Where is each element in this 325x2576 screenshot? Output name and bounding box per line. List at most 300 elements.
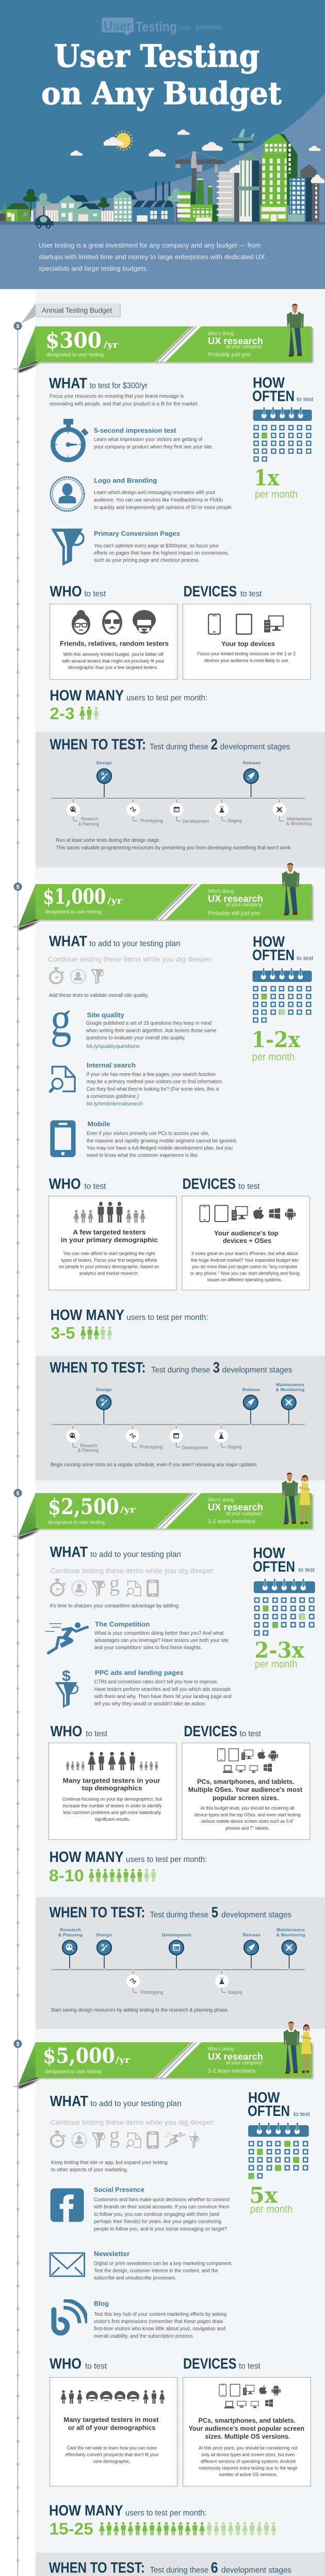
item: mobile: You may not have a full-fledged mobile development plan, but you — [87, 1145, 233, 1151]
stage timeline: Staging — [228, 1990, 242, 1995]
DEVICES panel: sizes. Multiple OS versions. — [205, 2433, 290, 2441]
DEVICES panel: you do more than just target users on "any computer — [192, 1264, 298, 1269]
stage timeline: Development — [162, 1932, 191, 1937]
DEVICES panel: to test — [240, 589, 262, 599]
stage timeline: Research — [81, 817, 98, 822]
DEVICES panel: the huge Android market? Your expanded budget lets — [191, 1258, 299, 1263]
item: logo and branding: Logo and Branding — [94, 477, 157, 484]
stage timeline: & Planning — [58, 1932, 83, 1937]
DEVICES panel: only all device types and screen sizes, but even — [201, 2452, 295, 2458]
stage timeline: Development — [183, 819, 209, 824]
DEVICES panel: DEVICES — [184, 583, 237, 600]
HOW OFTEN: OFTEN — [253, 1558, 295, 1575]
stage timeline: & Planning — [78, 821, 99, 826]
WHAT heading — [48, 934, 213, 998]
WHAT heading: Continue testing these items while you dig deeper: — [51, 2118, 215, 2126]
banner: $5,000: Who's doing — [208, 2046, 234, 2052]
item: PPC ads and landing pages: PPC ads and landing pages — [95, 1669, 184, 1676]
DEVICES panel: Multiple OSes. Your audience's most — [188, 1786, 303, 1793]
tab: annual testing budget — [21, 303, 121, 324]
DEVICES panel: At this price point, you should be considering not — [199, 2446, 298, 2451]
banner: $2,500: 1-2 team members — [208, 1519, 255, 1525]
item: internal search — [50, 1061, 223, 1107]
item: the competition: The Competition — [95, 1620, 150, 1628]
item: PPC ads and landing pages: $ — [62, 1668, 71, 1685]
HOW MANY — [49, 2503, 278, 2538]
item: newsletter: subscribe and unsubscribe processes. — [94, 2276, 176, 2281]
WHAT heading: WHAT — [50, 2093, 88, 2110]
stage timeline: Development — [182, 1445, 208, 1450]
item: PPC ads and landing pages: CTRs and conversion rates don't tell you how to improve. — [94, 1680, 218, 1685]
tab: annual testing budget: Annual Testing Budget — [42, 306, 112, 314]
banner: $5,000: $5,000 — [43, 2044, 115, 2068]
item: site quality: g — [51, 992, 72, 1047]
HOW MANY — [50, 688, 207, 723]
item: newsletter — [50, 2250, 233, 2281]
WHAT heading: Keep testing that site or app, but expand your testing — [51, 2160, 168, 2165]
timeline spine with dots — [13, 326, 19, 2576]
banner: $1,000: Probably still just you — [208, 910, 260, 917]
HOW MANY — [51, 1307, 208, 1343]
item: social presence: Social Presence — [94, 2186, 144, 2194]
DEVICES panel: Your audience's top — [214, 1229, 279, 1237]
item: mobile: Mobile — [88, 1120, 110, 1128]
WHEN TO TEST panel: Begin running some tests on a regular schedule, even if you aren't releasing any major updates. — [51, 1462, 258, 1468]
WHO panel: Many targeted testers in most — [63, 2416, 159, 2424]
HOW MANY: users to test per month: — [125, 2509, 207, 2518]
logo: UserTesting presents: .com — [177, 24, 191, 31]
WHAT heading: WHAT — [50, 1544, 88, 1561]
WHAT heading: to test for $300/yr — [90, 381, 148, 390]
WHO panel: to test — [85, 589, 106, 599]
WHO panel: Cast the net wide to learn how you can more — [67, 2446, 157, 2451]
item: mobile — [50, 1120, 237, 1159]
DEVICES panel: popular screen sizes. — [213, 1794, 279, 1802]
WHEN TO TEST panel: 3 — [213, 1360, 220, 1376]
header panel — [0, 0, 325, 289]
WHAT heading: to add to your testing plan — [89, 940, 181, 948]
item: primary conversion pages: such as your pricing page and checkout process. — [94, 558, 200, 564]
banner: $2,500: designated to user testing — [48, 1520, 105, 1526]
item: site quality: questions to evaluate your overall site quality. — [86, 1036, 186, 1041]
WHAT heading: to add to your testing plan — [90, 1550, 181, 1559]
stage timeline: Maintenance — [276, 1382, 304, 1387]
DEVICES panel: different versions of operating systems. Android — [201, 2459, 296, 2464]
banner: $300: Who's doing — [208, 331, 234, 337]
banner: $300: $300 — [45, 328, 102, 353]
DEVICES panel: DEVICES — [184, 1723, 237, 1740]
HOW MANY: 15-25 — [50, 2520, 93, 2538]
HOW OFTEN: per month — [255, 1658, 298, 1670]
item: site quality: when writing their search algorithm. Ask testers those same — [86, 1028, 217, 1034]
HOW MANY: 8-10 — [49, 1866, 84, 1885]
item: the competition: What is your competition doing better than you? And what — [94, 1631, 224, 1636]
banner: $2,500: at your company: — [226, 1511, 263, 1517]
title: on Any Budget — [41, 76, 282, 112]
WHEN TO TEST panel: development stages — [221, 1910, 291, 1919]
WHEN TO TEST panel: Test during these — [150, 1910, 208, 1919]
HOW OFTEN: HOW — [253, 375, 285, 392]
stage timeline: & Planning — [78, 1448, 99, 1453]
WHO panel: Friends, relatives, random testers — [60, 640, 169, 647]
WHAT heading: $ — [193, 2131, 197, 2137]
main column background — [36, 289, 325, 2576]
WHAT heading: g — [109, 1571, 120, 1596]
logo: UserTesting presents: presents — [196, 23, 222, 31]
DEVICES panel: Focus your limited testing resources on the 1 or 2 — [197, 651, 296, 657]
stage timeline: Release — [243, 760, 261, 766]
HOW OFTEN: per month — [250, 2204, 293, 2215]
HOW OFTEN: HOW — [253, 1545, 285, 1562]
HOW MANY: HOW MANY — [49, 2503, 123, 2519]
item: primary conversion pages: Primary Conversion Pages — [94, 530, 180, 537]
WHO panel: WHO — [51, 1723, 83, 1740]
illustration: city skyline — [0, 129, 325, 229]
WHO panel — [50, 583, 177, 680]
stage timeline: Release — [242, 1387, 260, 1392]
WHEN TO TEST panel: WHEN TO TEST: — [50, 1904, 145, 1921]
banner: $5,000: 1-2 team members — [208, 2068, 255, 2074]
item: logo and branding — [51, 477, 233, 511]
item: site quality: bit.ly/qualityquestions — [87, 1044, 140, 1049]
DEVICES panel: DEVICES — [183, 2356, 236, 2372]
WHO panel: types of testers. Focus your first targeting efforts — [61, 1258, 157, 1263]
stage timeline: Staging — [228, 818, 242, 823]
banner: $2,500: $ — [16, 1490, 20, 1497]
item: internal search: a conversion goldmine.) — [87, 1094, 139, 1099]
WHEN TO TEST panel: development stages — [221, 2566, 291, 2574]
WHAT heading — [50, 1544, 216, 1609]
title — [41, 39, 282, 112]
WHO panel: analytics and market research. — [79, 1271, 139, 1277]
stage timeline: Design — [96, 1387, 112, 1392]
HOW MANY: 2-3 — [50, 704, 75, 723]
item: primary conversion pages: You can't optimize every page at $300/year, so focus your — [94, 543, 219, 549]
item: site quality: Site quality — [87, 1011, 125, 1019]
stage timeline: Prototyping — [140, 1445, 163, 1450]
item: internal search: If your site has more than a few pages, your search function — [87, 1072, 216, 1078]
WHEN TO TEST panel: WHEN TO TEST: — [50, 737, 146, 753]
WHAT heading: to other aspects of your marketing. — [51, 2167, 128, 2173]
DEVICES panel: Your top devices — [221, 640, 275, 648]
banner: $5,000: /yr — [116, 2055, 131, 2065]
item: internal search: Internal search — [87, 1061, 136, 1069]
WHO panel: WHO — [50, 2356, 82, 2372]
stage timeline — [51, 1927, 306, 1995]
banner: $300: Probably just you — [208, 351, 251, 358]
DEVICES panel: phones and 7" tablets. — [225, 1825, 270, 1831]
HOW MANY: HOW MANY — [50, 1849, 123, 1866]
banner: $1,000: /yr — [107, 896, 123, 906]
intro text — [39, 242, 265, 273]
item: blog: Test this key hub of your content marketing efforts by asking — [94, 2312, 226, 2317]
HOW OFTEN — [252, 375, 313, 500]
WHO panel: effectively convert prospects that don't fit your — [66, 2452, 159, 2458]
HOW OFTEN — [253, 1545, 315, 1670]
WHO panel: Continue focusing on your top demographics, but — [62, 1797, 162, 1802]
banner: $1,000: UX research — [208, 893, 263, 904]
banner: $300: /yr — [104, 340, 119, 350]
WHEN TO TEST panel: Test during these — [150, 743, 208, 752]
banner: $2,500: $2,500 — [48, 1494, 119, 1519]
WHAT heading: WHAT — [49, 375, 87, 392]
banner: $300 — [13, 303, 313, 373]
banner: $5,000: UX research — [208, 2052, 263, 2062]
WHAT heading: Continue testing these items while you dig deeper: — [51, 1566, 215, 1574]
WHO panel: less common problems and get more statistically — [63, 1810, 161, 1816]
DEVICES panel: various mobile device screen sizes such as 5-6" — [201, 1819, 294, 1824]
WHAT heading: to add to your testing plan — [90, 2099, 182, 2108]
DEVICES panel: device types and the top OSes, and even start testing — [194, 1812, 301, 1818]
stage timeline: Release — [243, 1932, 261, 1937]
HOW OFTEN — [251, 934, 313, 1063]
item: blog: Blog — [94, 2300, 109, 2308]
HOW OFTEN: 1-2x — [251, 1027, 301, 1053]
banner: $300: designated to user testing — [46, 352, 104, 358]
HOW OFTEN: OFTEN — [252, 388, 295, 405]
WHO panel: increase the number of testers in order to identify — [63, 1803, 162, 1809]
WHEN TO TEST panel: development stages — [222, 1366, 292, 1375]
HOW OFTEN: 5x — [249, 2183, 278, 2208]
HOW MANY: 3-5 — [51, 1324, 75, 1343]
DEVICES panel: to test — [238, 1182, 260, 1191]
WHEN TO TEST panel: Run at least some tests during the design stage. — [56, 838, 160, 843]
WHEN TO TEST panel: 6 — [211, 2560, 218, 2576]
HOW OFTEN: to test — [297, 955, 313, 961]
HOW MANY — [49, 1849, 207, 1885]
WHAT heading — [49, 375, 199, 407]
WHEN TO TEST panel — [36, 732, 325, 868]
item: PPC ads and landing pages: with them and why. Then have them hit your landing page and — [94, 1694, 232, 1700]
banner: $300: $ — [16, 324, 20, 330]
WHAT heading — [50, 2093, 216, 2173]
item: logo and branding: to quickly and inexpensively get opinions of 50 or more people. — [94, 505, 233, 511]
WHEN TO TEST panel: Test during these — [151, 1366, 210, 1375]
item: mobile: Even if your visitors primarily use PCs to access your site, — [87, 1131, 209, 1137]
HOW OFTEN: to test — [294, 2111, 310, 2117]
banner: $2,500: UX research — [208, 1502, 263, 1513]
item: PPC ads and landing pages: tell you why they would or wouldn't take an action. — [94, 1701, 206, 1707]
WHAT heading: resonating with people, and that your product is a fit for the market. — [50, 401, 199, 407]
stage timeline: Design — [96, 1932, 112, 1937]
WHAT heading: WHAT — [49, 934, 87, 950]
stage timeline: Maintenance — [287, 817, 312, 822]
item: blog: first-time visitors who know little about you), navigation and — [94, 2326, 225, 2332]
stage timeline — [51, 760, 312, 826]
HOW OFTEN: to test — [299, 1567, 315, 1573]
WHO panel: or all of your demographics — [68, 2424, 155, 2431]
item: primary conversion pages: efforts on pages that have the highest impact on conversions, — [94, 551, 229, 556]
DEVICES panel: issues on different operating systems. — [207, 1277, 282, 1283]
WHEN TO TEST panel: WHEN TO TEST: — [50, 1360, 146, 1376]
banner: $1,000 — [13, 862, 313, 930]
WHEN TO TEST panel: WHEN TO TEST: — [49, 2560, 145, 2576]
WHO panel: With this severely limited budget, you're better off — [63, 652, 164, 657]
item: social presence: Customers and fans make quick decisions whether to connect — [94, 2197, 230, 2202]
title: User Testing — [54, 39, 259, 75]
banner: $1,000: at your company: — [226, 902, 263, 908]
item: 5-second impression test: your company or product when they first see your site. — [94, 444, 213, 450]
WHEN TO TEST panel: Test during these — [150, 2566, 208, 2574]
WHO panel: WHO — [50, 583, 82, 600]
WHEN TO TEST panel: 5 — [212, 1904, 218, 1921]
WHO panel: significant results. — [95, 1817, 130, 1822]
item: social presence: perhaps their friends) for years. Are your pages convincing — [94, 2219, 221, 2225]
WHAT heading: It's time to sharpen your competitive advantage by adding: — [50, 1603, 180, 1609]
stage timeline: Research — [60, 1927, 81, 1933]
banner: $5,000 — [13, 2021, 313, 2089]
item: social presence: to follow you, you can continue engaging with them (and — [94, 2212, 219, 2217]
item: social presence: people to follow you, and is your social messaging on target? — [94, 2227, 227, 2232]
intro text: User testing is a great investment for any company and any budget — from — [39, 242, 261, 249]
item: 5-second impression test: Learn what impression your visitors are getting of — [94, 437, 202, 443]
WHO panel: WHO — [49, 1176, 81, 1192]
item: logo and branding: Learn which design and messaging resonates with your — [94, 490, 216, 496]
HOW MANY: users to test per month: — [126, 694, 207, 703]
item: social presence — [51, 2186, 230, 2232]
banner: $300: at your company: — [226, 344, 263, 350]
item: site quality — [51, 992, 217, 1049]
DEVICES panel: PCs, smartphones, and tablets. — [197, 1777, 295, 1786]
WHO panel — [48, 1723, 176, 1840]
stage timeline: & Monitoring — [286, 821, 312, 826]
item: mobile: need to know what the customer experience is like. — [87, 1153, 199, 1159]
WHO panel: Many targeted testers in your — [63, 1776, 160, 1784]
WHEN TO TEST panel: This saves valuable programming resources by preventing you from developing something that won't work. — [56, 845, 292, 851]
banner: $5,000: $ — [16, 2041, 20, 2047]
WHO panel: core demographic. — [93, 2459, 131, 2464]
item: blog — [54, 2300, 226, 2339]
item: PPC ads and landing pages: Have testers perform searches and tell you which ads resonate — [94, 1687, 231, 1692]
section: $5,000 per year — [13, 2021, 325, 2576]
DEVICES panel: PCs, smartphones, and tablets. — [198, 2416, 296, 2425]
WHO panel: You can now afford to start targeting the right — [63, 1251, 155, 1257]
item: newsletter: Digital or print newsletters can be a key marketing component. — [94, 2261, 233, 2267]
WHO panel: on people in your primary demographic, based on — [59, 1264, 159, 1269]
HOW OFTEN: to test — [297, 397, 313, 403]
WHEN TO TEST panel — [36, 2553, 325, 2576]
logo: UserTesting presents: Testing — [136, 19, 177, 35]
section: $1,000 per year — [13, 862, 325, 1481]
item: blog: overall usability, and the subscription process. — [94, 2334, 194, 2339]
DEVICES panel: It looks great on your team's iPhones, but what about — [191, 1251, 298, 1257]
banner: $5,000: at your company: — [226, 2060, 263, 2066]
HOW OFTEN: per month — [252, 1052, 295, 1063]
banner: $2,500 — [13, 1472, 313, 1539]
HOW MANY: users to test per month: — [126, 1855, 207, 1864]
WHO panel — [50, 2356, 177, 2486]
HOW OFTEN — [248, 2090, 310, 2215]
banner: $2,500: /yr — [120, 1505, 136, 1515]
stage timeline: Prototyping — [140, 818, 163, 823]
banner: $1,000: $ — [16, 884, 20, 890]
WHAT heading: g — [109, 2123, 120, 2148]
item: social presence: with brands on their social accounts. If you can convince them — [93, 2205, 230, 2210]
item: mobile: the massive and rapidly growing mobile segment cannot be ignored. — [87, 1138, 237, 1144]
section: $2,500 per year — [13, 1472, 325, 2029]
item: logo and branding: audience. You can use services like FeedbackArmy or Pickfu — [94, 498, 223, 503]
banner: $2,500: Who's doing — [208, 1497, 234, 1503]
WHO panel: to test — [86, 1730, 108, 1738]
WHAT heading: Add these tests to validate overall site quality. — [49, 993, 149, 998]
DEVICES panel: to test — [239, 2362, 261, 2371]
WHO panel: to test — [85, 1182, 106, 1191]
DEVICES panel: devices your audience is most likely to use. — [204, 658, 289, 664]
logo: UserTesting presents — [102, 18, 222, 36]
stage timeline: Design — [96, 760, 112, 766]
WHEN TO TEST panel: 2 — [211, 737, 218, 753]
DEVICES panel: notoriously requires extra testing due to the large — [199, 2465, 298, 2471]
stage timeline: Prototyping — [140, 1990, 163, 1995]
item: site quality: Google published a set of 23 questions they keep in mind — [86, 1021, 212, 1026]
DEVICES panel: to test — [239, 1730, 261, 1738]
WHAT heading: Focus your resources on ensuring that your brand message is — [50, 394, 184, 399]
item: internal search: may be a primary method your visitors use to find information. — [87, 1079, 223, 1085]
WHO panel — [48, 1176, 176, 1290]
HOW OFTEN: HOW — [248, 2090, 280, 2106]
WHAT heading: Continue testing these items while you dig deeper: — [48, 955, 213, 963]
DEVICES panel: DEVICES — [183, 1176, 236, 1192]
WHEN TO TEST panel: Start saving design resources by adding testing to the research & planning phase. — [51, 2007, 229, 2013]
DEVICES panel — [183, 583, 311, 680]
item: the competition — [45, 1620, 229, 1653]
item: internal search: Can they find what they're looking for? (For some sites, this is — [87, 1087, 219, 1092]
item: PPC ads and landing pages — [55, 1668, 232, 1708]
banner: $1,000: designated to user testing — [45, 909, 102, 915]
DEVICES panel: number of active OS versions. — [219, 2472, 278, 2478]
DEVICES panel — [182, 1176, 310, 1290]
WHO panel: demographic than just a few targeted testers. — [68, 665, 158, 671]
WHEN TO TEST panel — [36, 1897, 325, 2029]
HOW OFTEN: 2-3x — [254, 1637, 304, 1663]
DEVICES panel: or any phone." Now you can start identifying and fixing — [190, 1271, 300, 1277]
stage timeline: Research — [80, 1443, 97, 1448]
HOW MANY: users to test per month: — [127, 1313, 208, 1322]
stage timeline: & Monitoring — [275, 1387, 305, 1392]
banner: $1,000: Who's doing — [208, 889, 234, 894]
stage timeline — [51, 1382, 306, 1453]
item: 5-second impression test: 5-second impression test — [94, 427, 176, 434]
HOW OFTEN: HOW — [253, 934, 285, 951]
WHEN TO TEST panel: development stages — [220, 743, 290, 752]
DEVICES panel: At this budget level, you should be covering all — [200, 1806, 295, 1811]
intro text: startups with limited time and money to large enterprises with dedicated UX — [39, 253, 265, 261]
item: blog: visitor's first impressions (remember that these pages draw — [94, 2319, 223, 2325]
banner: $5,000: designated to user testing — [45, 2069, 102, 2075]
stage timeline: Staging — [227, 1445, 241, 1450]
WHO panel: with several testers that might not precisely fit your — [61, 658, 165, 664]
DEVICES panel: devices + OSes — [223, 1237, 271, 1245]
item: primary conversion pages — [51, 529, 229, 566]
section: $300 per year — [13, 303, 325, 868]
item: the competition: and your competitors' sites to find these insights. — [94, 1645, 202, 1651]
WHO panel: to test — [85, 2362, 107, 2371]
WHO panel: top demographics — [82, 1784, 142, 1792]
HOW MANY: HOW MANY — [50, 688, 124, 704]
stage timeline: Maintenance — [277, 1927, 305, 1933]
intro text: specialists and large testing budgets. — [39, 265, 148, 273]
HOW OFTEN: OFTEN — [248, 2103, 290, 2120]
banner: $300: UX research — [208, 336, 263, 346]
item: newsletter: Newsletter — [94, 2250, 130, 2258]
banner: $1,000: $1,000 — [43, 885, 106, 909]
DEVICES panel — [182, 1723, 310, 1840]
item: 5-second impression test — [53, 419, 213, 460]
stage timeline: & Monitoring — [277, 1932, 305, 1937]
DEVICES panel: Your audience's most popular screen — [189, 2425, 304, 2432]
WHO panel: A few targeted testers — [73, 1228, 145, 1236]
logo: UserTesting presents: User — [104, 18, 132, 33]
